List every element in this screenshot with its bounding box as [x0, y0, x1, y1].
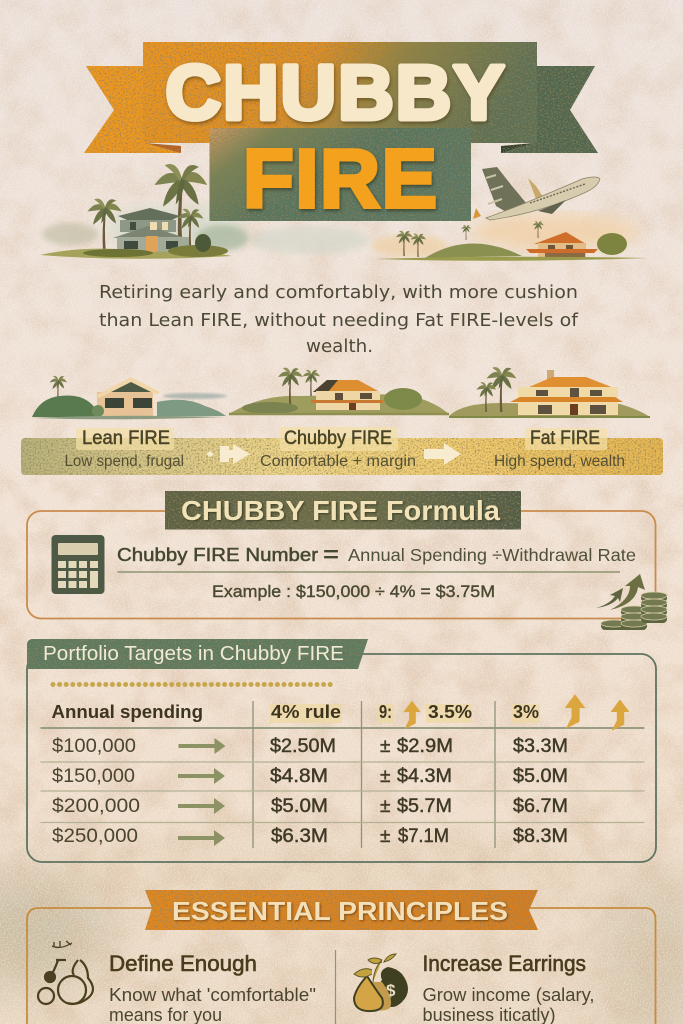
panel: portfolio targets table — [27, 639, 656, 862]
formula heading: CHUBBY FIRE Formula — [181, 495, 500, 526]
word: FIRE: FIRE — [243, 132, 437, 225]
illustration: airplane — [473, 167, 600, 220]
panel heading — [27, 639, 368, 669]
row: $150,000: $4.3M — [397, 766, 452, 787]
formula equation: = — [323, 542, 339, 567]
table header row: 3.5% — [428, 702, 472, 722]
FIRE spectrum strip — [21, 427, 663, 475]
table header row: 3% — [513, 702, 539, 722]
house — [526, 232, 598, 257]
table header row: 4% rule — [271, 702, 341, 722]
decorative dotted rule — [53, 682, 331, 687]
row: $200,000: $5.7M — [397, 796, 452, 817]
illustration: Chubby FIRE house — [229, 368, 449, 414]
row: $150,000: ± — [380, 766, 390, 787]
row: $100,000: $100,000 — [52, 736, 136, 757]
row: $250,000: $250,000 — [52, 826, 138, 847]
principles heading ribbon: ESSENTIAL PRINCIPLES — [172, 896, 508, 926]
table header row: 9: — [379, 702, 392, 722]
row: $100,000: $2.50M — [270, 736, 336, 757]
illustration: Lean FIRE house — [31, 376, 227, 419]
panel heading: Portfolio Targets in Chubby FIRE — [43, 643, 344, 665]
tier: Lean FIRE: Lean FIRE — [82, 428, 170, 449]
row: $100,000: $3.3M — [513, 736, 568, 757]
icon: up arrows — [403, 694, 629, 731]
row: $100,000: $2.9M — [397, 736, 453, 757]
row: $100,000 — [52, 736, 568, 757]
table grid — [40, 701, 644, 848]
icon: calculator — [52, 535, 104, 594]
highlight tabs — [76, 427, 607, 451]
tier: Chubby FIRE: Comfortable + margin — [260, 453, 416, 470]
row: $250,000: $7.1M — [398, 826, 449, 847]
principle: increase earnings: Increase Earrings — [422, 951, 586, 976]
row: $250,000: ± — [380, 826, 390, 847]
row: $200,000: $6.7M — [513, 796, 568, 817]
illustration: hillside house — [372, 214, 647, 261]
arrow: chubby to fat — [424, 443, 461, 465]
intro text: than Lean FIRE, without needing Fat FIRE-levels of — [99, 310, 579, 331]
right ribbon tail — [501, 66, 598, 153]
icon: coins and growth arrow — [596, 574, 667, 630]
tier: Fat FIRE: Fat FIRE — [530, 428, 600, 449]
lower banner — [210, 128, 471, 221]
illustration: palm island house — [40, 164, 248, 259]
world map haze — [250, 226, 370, 254]
principle: increase earnings — [354, 951, 594, 1024]
principle: define enough: Define Enough — [109, 951, 257, 976]
row: $100,000: ± — [380, 736, 390, 757]
row: $200,000: $5.0M — [271, 796, 328, 817]
principle: define enough — [38, 941, 316, 1024]
row: $150,000: $4.8M — [270, 766, 328, 787]
table header row: Annual spending — [52, 702, 203, 722]
arrow: lean to chubby — [206, 444, 250, 464]
tier: Fat FIRE — [494, 428, 625, 470]
worked example: Example : $150,000 ÷ 4% = $3.75M — [212, 582, 495, 601]
row: $250,000: $6.3M — [271, 826, 328, 847]
table header row — [52, 694, 629, 731]
principle: define enough: Know what 'comfortable" — [109, 985, 316, 1005]
tier: Lean FIRE: Low spend, frugal — [64, 453, 184, 470]
formula heading — [165, 491, 521, 530]
formula equation: Annual Spending ÷Withdrawal Rate — [348, 545, 636, 565]
tier: Chubby FIRE — [260, 428, 416, 470]
tier: Fat FIRE: High spend, wealth — [494, 453, 625, 470]
row: $200,000: ± — [380, 796, 390, 817]
intro text: wealth. — [306, 336, 373, 357]
principles heading ribbon — [145, 890, 538, 930]
upper banner — [143, 42, 537, 143]
house — [113, 208, 189, 254]
principle: increase earnings: Grow income (salary, — [422, 985, 594, 1005]
row: $200,000 — [52, 796, 568, 817]
tier: Chubby FIRE: Chubby FIRE — [284, 428, 392, 449]
word: CHUBBY: CHUBBY — [166, 50, 504, 136]
row: $200,000: $200,000 — [52, 796, 140, 817]
icon: money bags with sprout: $ — [386, 981, 396, 1000]
tier: Lean FIRE — [64, 428, 184, 470]
left ribbon tail — [84, 66, 181, 153]
row: $150,000: $5.0M — [513, 766, 568, 787]
icon: money bags with sprout — [354, 954, 408, 1011]
row: $150,000: $150,000 — [52, 766, 135, 787]
formula equation: Chubby FIRE Number — [117, 544, 318, 565]
intro text — [99, 282, 579, 357]
illustration: Fat FIRE house — [449, 367, 650, 417]
icon: gourds — [38, 941, 93, 1004]
row: $250,000 — [52, 826, 568, 847]
panel: formula — [27, 491, 667, 630]
intro text: Retiring early and comfortably, with more cushion — [99, 282, 578, 303]
row: $150,000 — [52, 766, 568, 787]
panel: essential principles — [27, 890, 656, 1024]
row: $250,000: $8.3M — [513, 826, 568, 847]
formula equation — [117, 542, 636, 567]
title banner: Chubby FIRE — [84, 42, 598, 225]
